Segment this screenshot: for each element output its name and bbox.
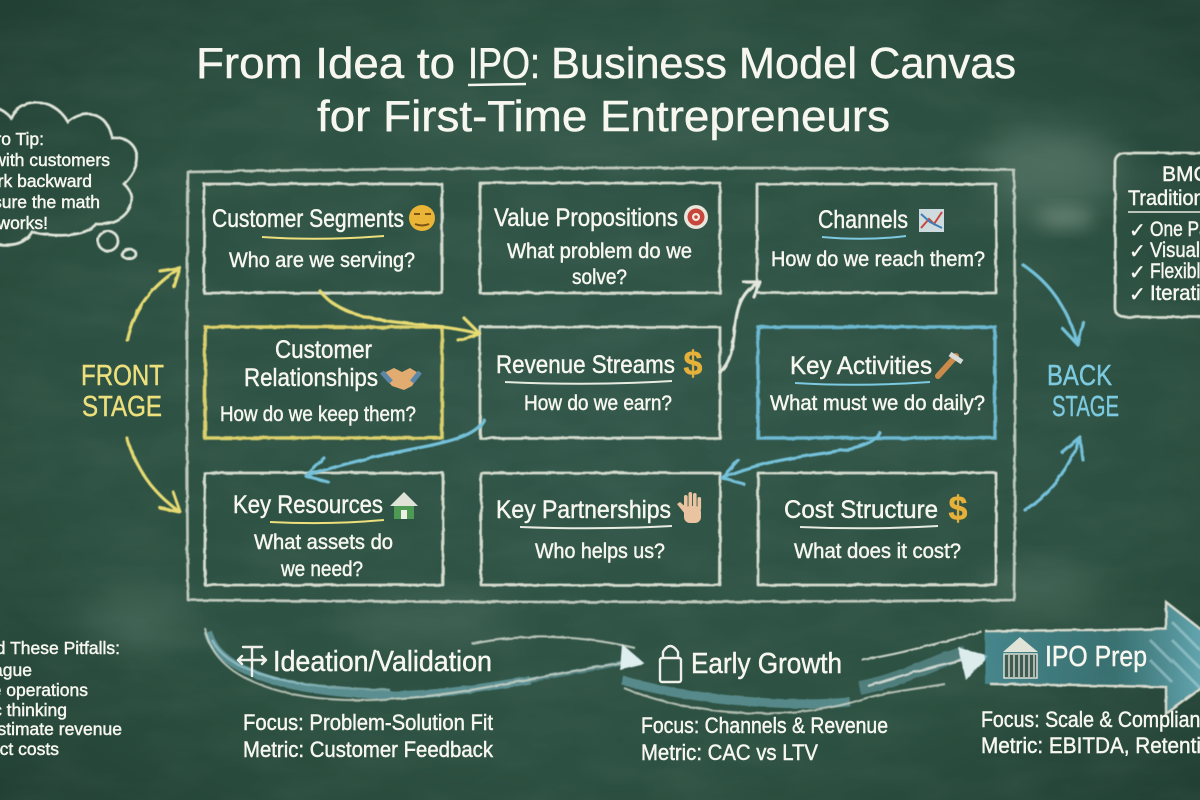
panel: value propositions: What problem do we bbox=[507, 240, 692, 263]
panel: customer segments bbox=[204, 184, 442, 293]
timeline stage: early growth: Metric: CAC vs LTV bbox=[641, 740, 818, 765]
ideation ribbon bbox=[205, 628, 645, 700]
panel: key activities: What must we do daily? bbox=[770, 392, 985, 415]
label: front stage: STAGE bbox=[82, 391, 162, 423]
pro tip text bbox=[0, 129, 110, 233]
arrow: front stage to top row bbox=[127, 268, 180, 340]
arrow: cost structure to back stage bbox=[1025, 437, 1083, 510]
panel: channels bbox=[757, 184, 996, 293]
arrow: channels to back stage bbox=[1023, 265, 1083, 345]
panel: key resources bbox=[205, 473, 443, 585]
icon: signpost bbox=[238, 647, 266, 676]
IPO prep arrow bbox=[985, 602, 1200, 714]
panel: key resources: What assets do bbox=[254, 531, 393, 554]
comparison list: ✓ bbox=[1129, 282, 1146, 306]
icon: target bbox=[684, 205, 708, 229]
title bbox=[196, 39, 1016, 141]
panel: key partnerships bbox=[481, 473, 720, 585]
panel: revenue streams: How do we earn? bbox=[524, 392, 672, 415]
panel outline bbox=[1115, 153, 1200, 317]
panel: channels: How do we reach them? bbox=[771, 248, 985, 271]
panel: value propositions bbox=[480, 183, 720, 293]
timeline stage: early growth: Early Growth bbox=[691, 648, 842, 680]
timeline stage: IPO prep bbox=[981, 637, 1200, 758]
title: IPO: bbox=[468, 39, 540, 88]
panel: value propositions: Value Propositions bbox=[494, 204, 678, 232]
panel: pro tip thought cloud bbox=[0, 103, 137, 259]
panel: customer relationships: Relationships bbox=[244, 364, 378, 392]
icon: bank bbox=[1003, 637, 1038, 678]
panel: key activities: Key Activities bbox=[790, 352, 932, 380]
arrow: key activities to partnerships bbox=[722, 433, 880, 484]
timeline stage: ideation bbox=[238, 646, 494, 762]
arrow: revenue to channels bbox=[720, 282, 760, 372]
timeline stage: IPO prep: IPO Prep bbox=[1045, 641, 1147, 673]
panel: cost structure bbox=[758, 473, 996, 585]
timeline: ribbon arrow bbox=[205, 602, 1200, 714]
panel: customer segments: Who are we serving? bbox=[229, 249, 415, 272]
panel: cost structure: What does it cost? bbox=[794, 540, 961, 563]
icon: house bbox=[390, 492, 418, 519]
panel: key partnerships: Key Partnerships bbox=[496, 496, 671, 524]
panel: channels: Channels bbox=[818, 206, 908, 234]
timeline stage: early growth bbox=[641, 646, 888, 765]
icon: lock bbox=[660, 646, 681, 682]
label: back stage: STAGE bbox=[1052, 391, 1119, 423]
arrow: revenue to key resources bbox=[306, 420, 484, 482]
arrow: front stage to bottom row bbox=[127, 438, 180, 512]
panel: customer relationships bbox=[205, 327, 442, 438]
timeline stage: ideation: Focus: Problem-Solution Fit bbox=[243, 710, 493, 735]
panel: revenue streams: Revenue Streams bbox=[496, 351, 675, 379]
canvas outer frame bbox=[187, 168, 1015, 602]
comparison list: ✓ bbox=[1129, 239, 1146, 263]
icon: handshake bbox=[382, 368, 420, 390]
timeline stage: ideation: Metric: Customer Feedback bbox=[243, 737, 494, 762]
timeline stage: ideation: Ideation/Validation bbox=[273, 646, 492, 678]
icon: trend chart bbox=[919, 209, 944, 232]
panel: customer segments: Customer Segments bbox=[212, 205, 404, 233]
label: back stage bbox=[1047, 360, 1119, 423]
icon: raised hand bbox=[677, 492, 701, 523]
title: for First-Time Entrepreneurs bbox=[317, 92, 890, 141]
panel: key partnerships: Who helps us? bbox=[535, 540, 665, 563]
panel: customer relationships: Customer bbox=[275, 336, 372, 364]
label: front stage: FRONT bbox=[81, 360, 164, 392]
comparison list: ✓ bbox=[1129, 218, 1146, 242]
comparison list: ✓ bbox=[1129, 260, 1146, 284]
panel: revenue streams bbox=[480, 327, 720, 438]
icon: dollar sign: $ bbox=[684, 345, 703, 383]
icon: tools bbox=[938, 354, 962, 376]
thought bubbles bbox=[98, 231, 136, 259]
panel: key resources: we need? bbox=[280, 558, 363, 581]
comparison list bbox=[1128, 163, 1200, 306]
cloud outline bbox=[0, 103, 137, 245]
panel: customer relationships: How do we keep them? bbox=[220, 403, 416, 426]
label: back stage: BACK bbox=[1047, 360, 1113, 392]
panel: BMC vs traditional bbox=[1115, 153, 1200, 317]
title: Business Model Canvas bbox=[551, 39, 1016, 88]
arrow: segments to revenue bbox=[320, 291, 480, 340]
panel: pitfalls list bbox=[0, 638, 122, 759]
timeline stage: early growth: Focus: Channels & Revenue bbox=[641, 713, 888, 738]
label: front stage bbox=[81, 360, 164, 423]
panel: key resources: Key Resources bbox=[233, 491, 383, 519]
icon: dollar sign: $ bbox=[949, 490, 968, 528]
icon: smiling face bbox=[409, 205, 435, 231]
panel: key activities bbox=[758, 327, 995, 438]
early growth ribbon bbox=[622, 632, 988, 713]
panel: cost structure: Cost Structure bbox=[784, 496, 938, 524]
panel: value propositions: solve? bbox=[572, 266, 627, 289]
title: From Idea to bbox=[196, 39, 455, 88]
